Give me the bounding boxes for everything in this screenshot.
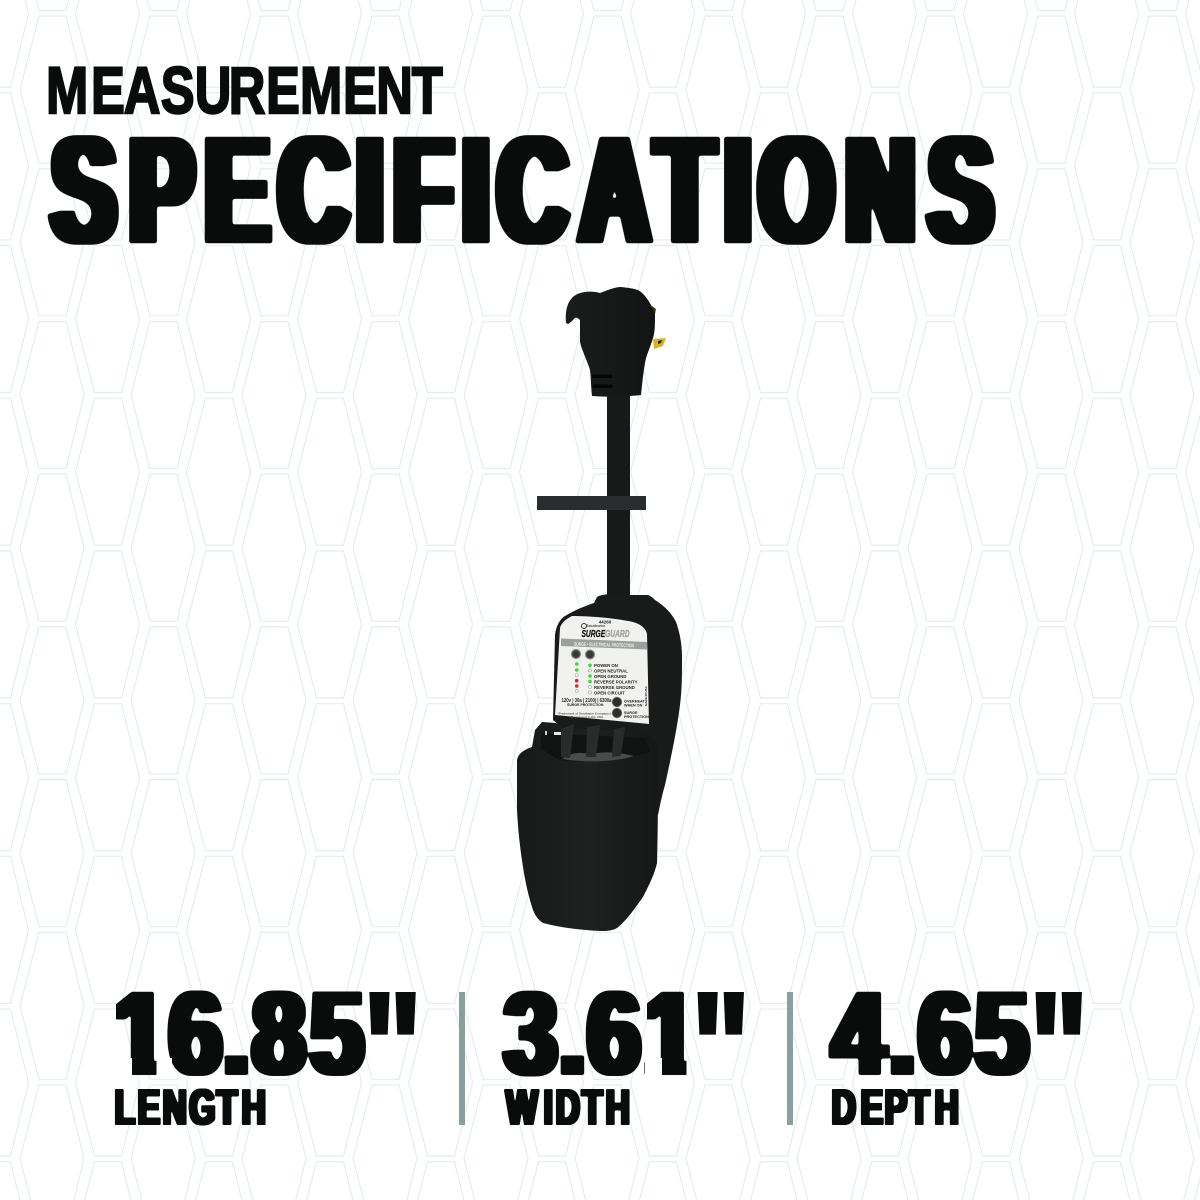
model number: 44260 (599, 620, 612, 624)
stat: depth: DEPTH (832, 1080, 959, 1135)
divider (459, 992, 465, 1125)
plug vent slots (592, 374, 612, 388)
stat: length: LENGTH (115, 1080, 266, 1135)
side label: MADE IN USA (644, 685, 648, 706)
trademark note (558, 712, 617, 719)
trademark note: *Trademark of Southwire Company, LLC (558, 712, 617, 716)
stat: depth: " (1029, 960, 1089, 1134)
cable (607, 390, 630, 605)
stat: length: " (363, 960, 422, 1134)
divider (787, 992, 793, 1125)
button labels: SURGE (624, 711, 638, 715)
button labels: WHEN ON (624, 704, 643, 708)
status labels (594, 663, 638, 696)
status labels: OPEN NEUTRAL (594, 668, 628, 674)
icon: southwire logo (582, 624, 586, 628)
button labels: OVERHEAT (624, 700, 645, 704)
stat: depth (832, 960, 1089, 1135)
label panel (555, 616, 649, 724)
brand: southwire: Southwire (586, 623, 606, 628)
stat: length: 16.85 (113, 968, 364, 1099)
status labels: REVERSE POLARITY (594, 680, 638, 684)
button labels: PROTECTION (624, 715, 649, 719)
stat: width (501, 990, 744, 1125)
band: surge electrical protection: SURGE • ELECTRICAL PROTECTION (574, 642, 634, 649)
surge protection caption: SURGE PROTECTION (567, 703, 604, 707)
brand: surge guard: SURGEGUARD (582, 629, 630, 640)
product: surge protector (517, 287, 682, 931)
heading: measurement: MEASUREMENT (46, 55, 443, 127)
cover hinge recess (541, 724, 650, 761)
stat: length (114, 990, 416, 1126)
heading: specifications: SPECIFICATIONS (52, 105, 993, 275)
indicator knobs (572, 650, 594, 659)
rear housing (553, 594, 682, 815)
status labels: REVERSE GROUND (594, 685, 635, 690)
status leds: right column (588, 664, 592, 694)
ratings text: 120v | 30a | 2100j | 6300a (562, 698, 612, 704)
plug head (566, 287, 655, 397)
stat: width: " (691, 960, 751, 1134)
indicator buttons (612, 697, 622, 718)
status labels: OPEN GROUND (594, 674, 626, 679)
button labels (624, 700, 649, 719)
cable strap (537, 496, 646, 510)
status labels: OPEN CIRCUIT (594, 690, 625, 696)
status leds: left column (575, 662, 578, 693)
stat: width: 3.61 (504, 968, 697, 1099)
status labels: POWER ON (594, 663, 618, 668)
icon: yellow plug prong (652, 306, 666, 349)
trademark note: Registered in the USA (571, 715, 604, 719)
front cover (517, 722, 658, 931)
stat: width: WIDTH (506, 1080, 630, 1135)
stat: depth: 4.65 (832, 968, 1029, 1099)
